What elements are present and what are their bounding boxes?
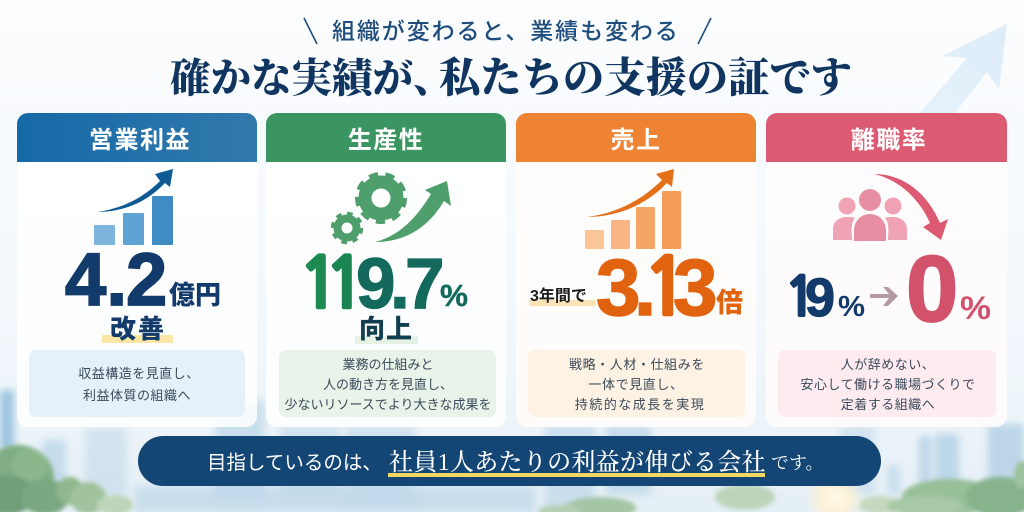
note box: 収益構造を見直し、 xyxy=(78,366,200,381)
panel header: productivity xyxy=(266,113,506,162)
banner: goal statement xyxy=(138,436,881,486)
banner: goal statement: 社員1人あたりの利益が伸びる会社 xyxy=(389,449,766,476)
note box: 一体で見直し、 xyxy=(588,377,684,392)
icon: rising bar chart xyxy=(94,169,173,245)
panel header: productivity: 生産性 xyxy=(348,127,424,154)
note box xyxy=(778,350,996,417)
panel: turnover xyxy=(766,113,1007,427)
background: trees and sun glow xyxy=(0,445,1024,512)
metric: 119.7 percent: 1 xyxy=(298,250,340,319)
metric: 119.7 percent xyxy=(298,245,468,324)
note box: 持続的な成長を実現 xyxy=(575,397,705,412)
metric label: improvement: 改善 xyxy=(110,314,166,344)
note box: 人の動き方を見直し、 xyxy=(323,377,453,392)
metric: 3.13 times in 3 years: 倍 xyxy=(716,288,743,318)
metric: 4.2 oku yen: 4.2 xyxy=(65,238,167,321)
metric: 19 percent to 0 percent: 1 xyxy=(784,272,817,325)
note box xyxy=(528,350,745,417)
metric: 19 percent to 0 percent: % xyxy=(960,290,991,326)
note box: 安心して働ける職場づくりで xyxy=(800,377,976,392)
metric: 4.2 oku yen: 億円 xyxy=(169,280,221,310)
note box: 人が辞めない、 xyxy=(841,357,935,372)
metric: 3.13 times in 3 years: 1 xyxy=(642,249,690,327)
metric: 3.13 times in 3 years xyxy=(529,243,743,332)
metric: 119.7 percent: 1 xyxy=(324,250,366,319)
note box: 定着する組織へ xyxy=(841,397,935,412)
note box xyxy=(279,350,496,417)
panel: operating profit xyxy=(17,113,257,427)
metric: 4.2 oku yen xyxy=(65,238,221,321)
panel header: operating profit: 営業利益 xyxy=(89,127,191,154)
icon: people and falling arrow xyxy=(833,174,948,241)
arrow: from 19 to 0 xyxy=(870,287,898,306)
panel header: sales xyxy=(516,113,756,162)
metric: 19 percent to 0 percent xyxy=(784,236,991,341)
metric label: increase: 向上 xyxy=(359,314,413,344)
banner: goal statement: です。 xyxy=(771,453,824,473)
icon: rising bars xyxy=(585,169,681,249)
background: large faint rising arrow xyxy=(920,24,1007,113)
metric: 19 percent to 0 percent: 0 xyxy=(906,236,958,341)
metric: 3.13 times in 3 years: 3 xyxy=(673,243,718,332)
panel: productivity xyxy=(266,113,506,427)
background: blurred city skyline xyxy=(0,390,1024,512)
panel header: turnover xyxy=(766,113,1007,162)
metric: 119.7 percent: 9.7 xyxy=(356,245,444,324)
title: 私たちの支援の証です xyxy=(439,55,852,101)
subtitle: 組織が変わると、業績も変わる xyxy=(332,18,680,44)
panel header: sales: 売上 xyxy=(610,127,662,154)
metric: 19 percent to 0 percent: % xyxy=(838,291,865,323)
note box xyxy=(29,350,245,417)
panel: sales xyxy=(516,113,756,427)
panel header: operating profit xyxy=(17,113,257,162)
banner: goal statement: 目指しているのは、 xyxy=(207,452,382,474)
metric: 3.13 times in 3 years: 3年間で xyxy=(530,286,587,305)
title: 確かな実績が、 xyxy=(170,56,454,101)
metric: 3.13 times in 3 years: 3. xyxy=(596,243,656,332)
note box: 業務の仕組みと xyxy=(342,357,434,372)
metric: 19 percent to 0 percent: 9 xyxy=(805,268,835,328)
note box: 利益体質の組織へ xyxy=(83,388,191,403)
metric: 119.7 percent: % xyxy=(440,278,468,313)
panel header: turnover: 離職率 xyxy=(851,127,927,154)
note box: 戦略・人材・仕組みを xyxy=(569,357,705,372)
icon: gears and arrow xyxy=(333,175,451,242)
note box: 少ないリソースでより大きな成果を xyxy=(284,397,492,412)
